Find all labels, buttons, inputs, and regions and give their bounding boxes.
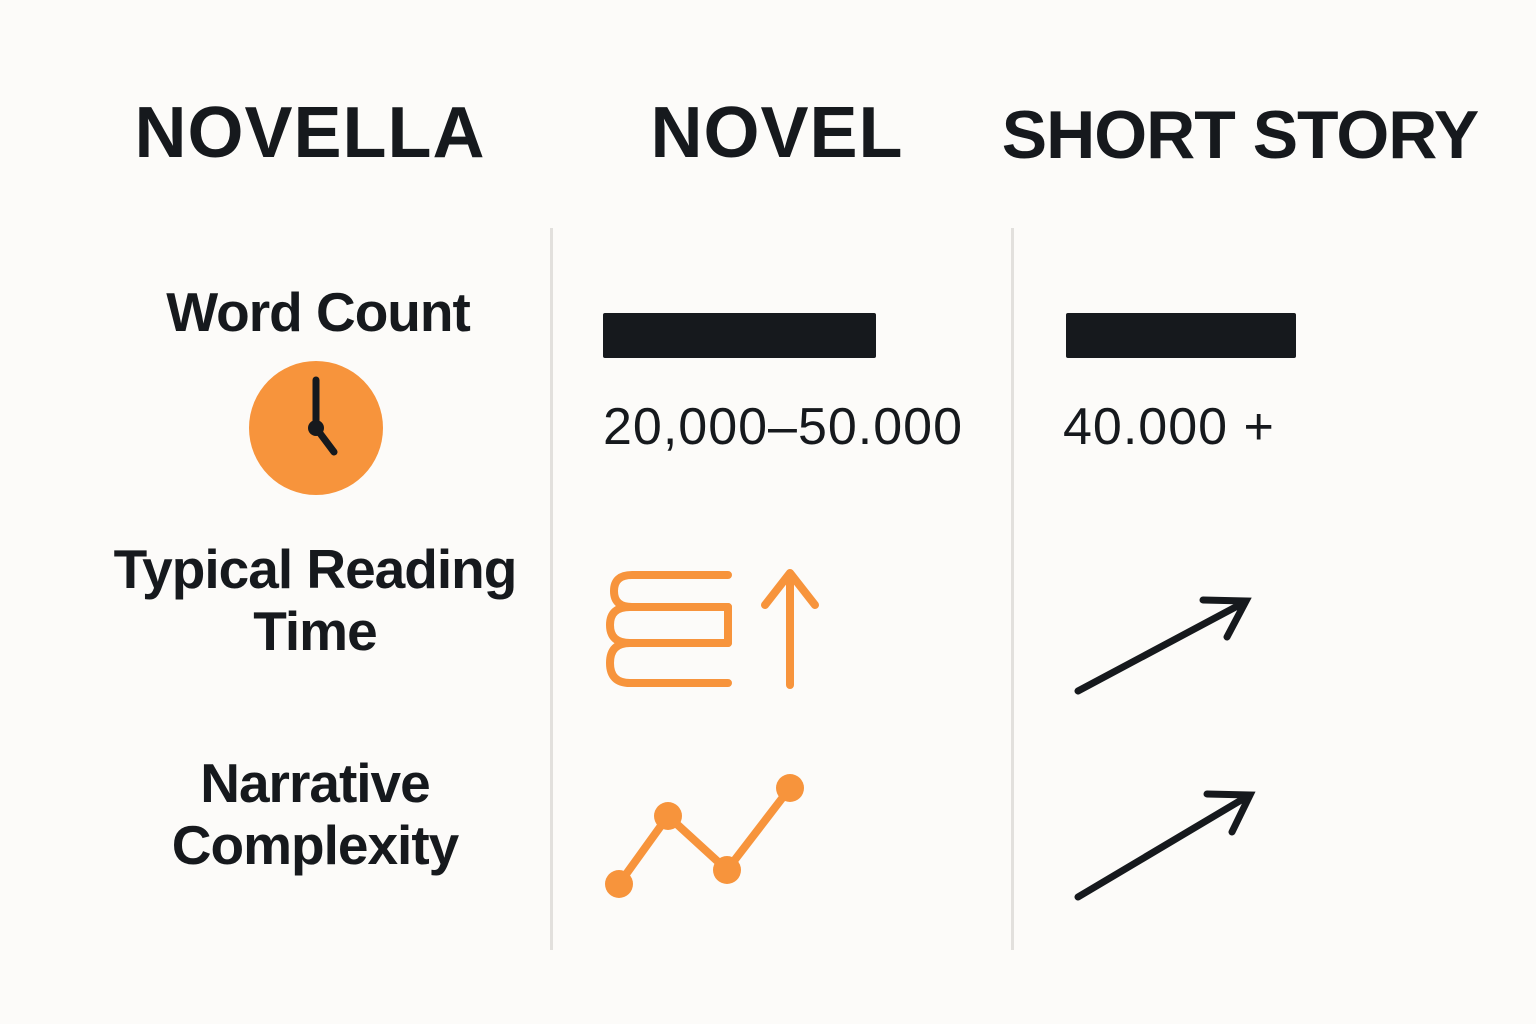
label: typical reading time — [114, 538, 516, 662]
arrow: reading time — [1074, 596, 1252, 694]
icon: books with up arrow — [606, 569, 819, 689]
arrow: complexity — [1074, 790, 1256, 900]
title: novella: NOVELLA — [134, 93, 486, 173]
title: novel: NOVEL — [650, 93, 904, 173]
text: novel word count: 20,000–50.000 — [603, 398, 963, 456]
icon: line chart — [605, 774, 804, 898]
label: word count: Word Count — [166, 281, 470, 343]
label: narrative complexity — [172, 752, 459, 876]
bar: novel word count — [603, 313, 876, 358]
label: typical reading time: Time — [253, 600, 377, 662]
bar: short story word count — [1066, 313, 1296, 358]
label: narrative complexity: Narrative — [200, 752, 430, 814]
title: short story: SHORT STORY — [1002, 97, 1478, 173]
label: typical reading time: Typical Reading — [114, 538, 516, 600]
text: short story word count: 40.000 + — [1063, 398, 1275, 456]
label: narrative complexity: Complexity — [172, 814, 458, 876]
icon: clock — [249, 361, 383, 495]
